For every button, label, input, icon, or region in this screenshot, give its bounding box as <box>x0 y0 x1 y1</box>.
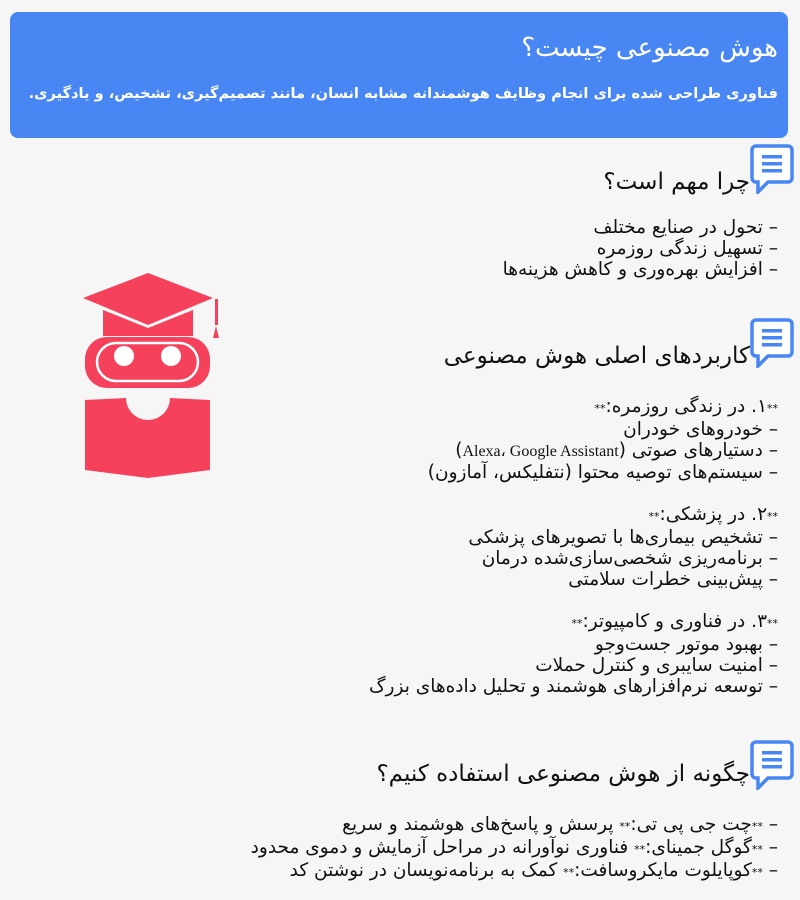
list: applications: – تشخیص بیماری‌ها با تصویرهای پزشکی <box>468 527 778 548</box>
list: applications: – توسعه نرم‌افزارهای هوشمند و تحلیل داده‌های بزرگ <box>369 676 778 697</box>
list: applications: **۳. در فناوری و کامپیوتر:** <box>571 611 778 632</box>
list: applications <box>369 395 778 697</box>
subtitle: فناوری طراحی شده برای انجام وظایف هوشمندانه مشابه انسان، مانند تصمیم‌گیری، تشخیص، و یادگیری. <box>29 85 778 102</box>
list: why important: – تحول در صنایع مختلف <box>593 217 778 238</box>
icon: chat bubble 2 <box>750 318 794 368</box>
list: applications: – سیستم‌های توصیه محتوا (نتفلیکس، آمازون) <box>428 462 778 483</box>
list: applications: – برنامه‌ریزی شخصی‌سازی‌شده درمان <box>482 548 778 569</box>
list: how to use: – **چت جی پی تی:** پرسش و پاسخ‌های هوشمند و سریع <box>342 814 778 835</box>
heading: why important: چرا مهم است؟ <box>603 169 750 195</box>
list: why important: – افزایش بهره‌وری و کاهش هزینه‌ها <box>503 259 778 280</box>
heading: applications: کاربردهای اصلی هوش مصنوعی <box>444 343 750 369</box>
list: how to use: – **گوگل جمینای:** فناوری نوآورانه در مراحل آزمایش و دموی محدود <box>251 837 778 858</box>
title: هوش مصنوعی چیست؟ <box>521 33 778 63</box>
list: applications: – خودروهای خودران <box>623 419 778 440</box>
list: applications: – بهبود موتور جست‌وجو <box>595 634 778 655</box>
icon: robot graduate <box>83 273 219 478</box>
list: applications: – دستیارهای صوتی (Alexa، Google Assistant) <box>455 440 778 461</box>
list: how to use: – **کوپایلوت مایکروسافت:** کمک به برنامه‌نویسان در نوشتن کد <box>290 860 778 881</box>
list: applications: **۱. در زندگی روزمره:** <box>594 396 778 417</box>
icon: chat bubble 1 <box>750 144 794 194</box>
icon: chat bubble 3 <box>750 740 794 790</box>
list: how to use <box>251 814 778 881</box>
heading: how to use: چگونه از هوش مصنوعی استفاده کنیم؟ <box>376 761 750 787</box>
list: applications: – امنیت سایبری و کنترل حملات <box>535 655 778 676</box>
header panel <box>10 12 788 138</box>
list: why important: – تسهیل زندگی روزمره <box>597 238 778 259</box>
list: why important <box>503 217 778 280</box>
list: applications: – پیش‌بینی خطرات سلامتی <box>568 569 778 590</box>
list: applications: **۲. در پزشکی:** <box>649 504 778 525</box>
